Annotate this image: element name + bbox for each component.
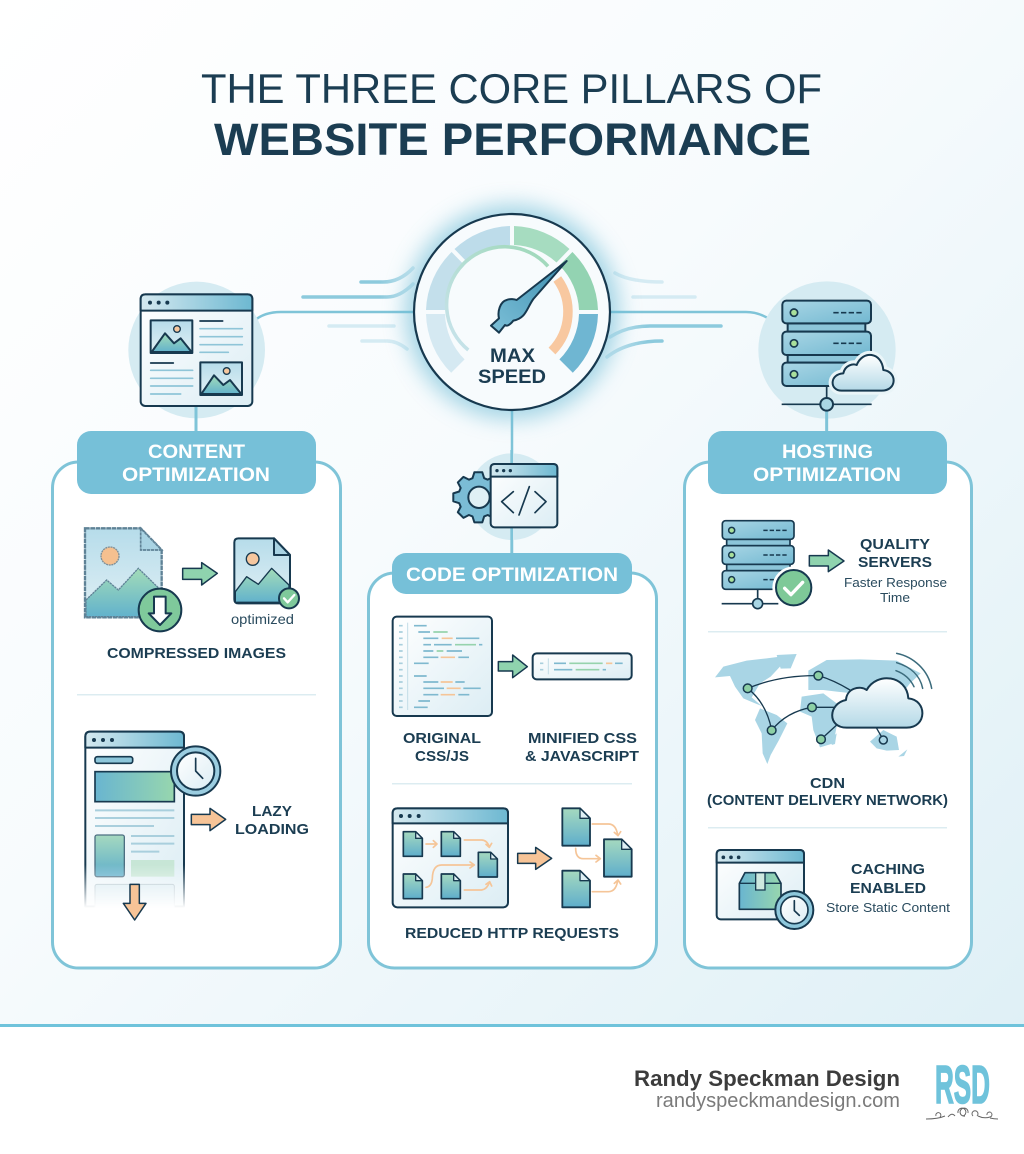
title: WEBSITE PERFORMANCE [214, 114, 811, 165]
gauge inner arc [447, 247, 548, 350]
caption: original css/js: CSS/JS [415, 748, 469, 765]
gauge label: MAX [490, 346, 535, 367]
icon: lazy loading page [85, 732, 226, 920]
pillar 1 icon: web page with images [128, 282, 265, 433]
footer credit: Randy Speckman Design [634, 1066, 900, 1091]
caption: caching enabled: CACHING [851, 861, 925, 878]
panel heading: OPTIMIZATION [753, 465, 901, 486]
panel frame [52, 462, 340, 968]
icon: reduced http requests [393, 808, 632, 907]
icon: quality server with check [722, 521, 844, 609]
caption: quality servers: Faster Response [844, 575, 947, 590]
caption: compressed images: COMPRESSED IMAGES [107, 645, 286, 662]
panel frame [368, 573, 656, 968]
caption: caching enabled: Store Static Content [826, 900, 950, 915]
panel heading: CODE OPTIMIZATION [406, 565, 618, 586]
caption: reduced http requests: REDUCED HTTP REQUESTS [405, 925, 619, 942]
caption: optimized: optimized [231, 611, 294, 627]
caption: cdn: CDN [810, 775, 845, 792]
panel: hosting optimization [684, 431, 972, 968]
panel heading [77, 431, 316, 494]
panel heading [392, 553, 632, 594]
caption: minified css and javascript: & JAVASCRIPT [525, 748, 639, 765]
pillar 3 icon: server with cloud [758, 281, 896, 433]
icon: world map cdn network [715, 653, 932, 764]
gauge speed segments [426, 226, 598, 373]
caption: minified css and javascript: MINIFIED CSS [528, 730, 637, 747]
speed lines [303, 268, 721, 357]
footer credit [634, 1066, 900, 1112]
panel: code optimization [368, 553, 656, 968]
icon: original code to minified [393, 617, 632, 716]
caption: quality servers [844, 536, 947, 605]
caption: lazy loading [235, 803, 309, 838]
panel heading: CONTENT [148, 442, 245, 463]
panel heading: OPTIMIZATION [122, 465, 270, 486]
caption: caching enabled [826, 861, 950, 915]
caption: original css/js [403, 730, 481, 765]
gauge glow [405, 205, 619, 419]
panel heading [708, 431, 947, 494]
gauge label: SPEED [478, 367, 546, 388]
icon: compressed image to optimized [85, 528, 299, 631]
footer rule [0, 1024, 1024, 1027]
caption: quality servers: QUALITY [860, 536, 930, 553]
caption: caching enabled: ENABLED [850, 880, 926, 897]
gauge [405, 205, 619, 419]
caption: lazy loading: LAZY [252, 803, 292, 820]
gauge label [478, 346, 546, 388]
caption: lazy loading: LOADING [235, 821, 309, 838]
gauge dial face [414, 214, 610, 410]
panel heading: HOSTING [782, 442, 873, 463]
caption: minified css and javascript [525, 730, 639, 765]
gauge orange arc [552, 279, 568, 351]
caption: quality servers: SERVERS [858, 554, 932, 571]
panel frame [684, 462, 972, 968]
title [201, 65, 822, 165]
panel: content optimization [52, 431, 340, 968]
title: THE THREE CORE PILLARS OF [201, 65, 822, 112]
caption: cdn [707, 775, 948, 809]
icon: caching window with box and clock [717, 850, 813, 929]
caption: cdn: (CONTENT DELIVERY NETWORK) [707, 792, 948, 809]
pillar 2 icon: gear and code window [453, 450, 557, 553]
caption: original css/js: ORIGINAL [403, 730, 481, 747]
footer credit: randyspeckmandesign.com [656, 1090, 900, 1112]
gauge needle [491, 261, 567, 333]
caption: quality servers: Time [880, 590, 910, 605]
footer logo [926, 1055, 998, 1119]
connector lines from gauge to pillars [253, 312, 784, 556]
